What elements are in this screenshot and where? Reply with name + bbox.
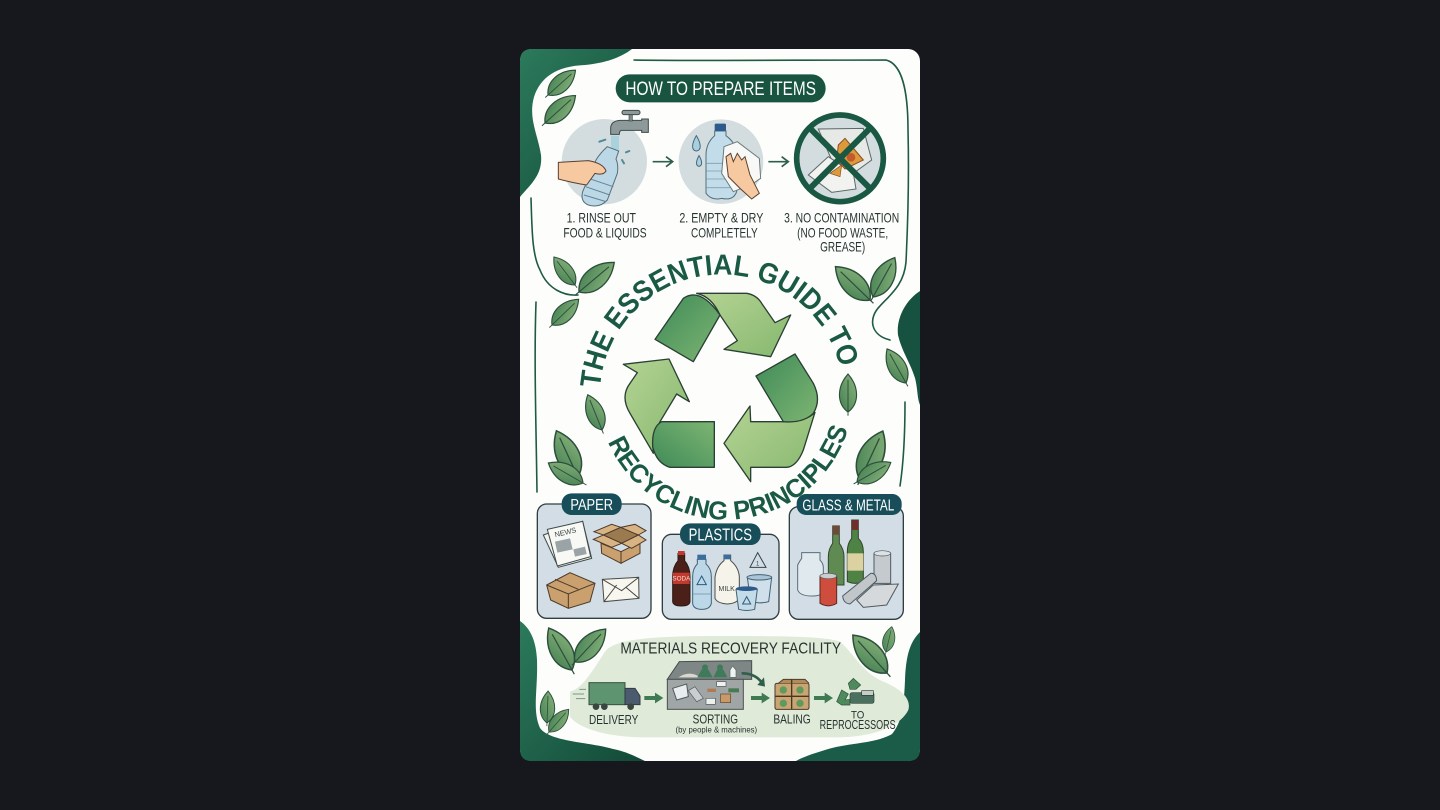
facility background [570,636,909,737]
corner blob: bottom left [520,621,645,761]
step labels: FOOD & LIQUIDS [563,225,647,240]
stage labels: TO [851,709,864,721]
panel: plastics [662,523,779,619]
arrow [644,693,663,703]
circular title [580,254,858,520]
arrow [653,157,673,167]
stage labels: BALING [773,712,811,727]
panel: plastics: SODA [672,576,691,583]
panel: paper: NEWS [554,525,577,539]
stage labels: REPROCESSORS [820,718,896,732]
panel: paper [537,493,651,618]
panel: glass & metal: GLASS & METAL [802,497,895,514]
stage labels: SORTING [693,712,738,727]
corner blob: top left [520,49,632,197]
panel: plastics: 1 [756,561,760,567]
icon: delivery truck [573,683,640,710]
heading pill: HOW TO PREPARE ITEMS [625,79,816,100]
leaves [536,64,916,739]
circular title: THE ESSENTIAL GUIDE TO [580,254,858,386]
step 3 icon: no pizza box [797,115,883,202]
corner blob: bottom right [796,632,920,761]
icon: sorting station [667,661,765,709]
infographic card [520,49,920,761]
panel: materials recovery facility [570,636,909,737]
circular title: RECYCLING PRINCIPLES [608,426,846,520]
stage labels: DELIVERY [589,712,638,727]
arrow [751,693,770,703]
step labels: COMPLETELY [691,225,758,240]
step 1 icon: rinse bottle under tap [558,110,648,206]
step labels: 1. RINSE OUT [567,211,637,226]
step labels: GREASE) [820,239,865,254]
panel: plastics: PLASTICS [689,525,752,545]
icon: bales [775,679,809,709]
panel: how to prepare items [558,74,899,254]
panel: paper: PAPER [570,497,613,514]
frame lines [531,60,908,492]
arrow [768,157,788,167]
arrow [814,693,833,703]
recycling symbol [623,293,817,482]
panel: glass & metal [789,494,903,619]
heading: MATERIALS RECOVERY FACILITY [620,641,841,658]
step labels: 3. NO CONTAMINATION [784,211,899,226]
edge blob: right middle [898,291,920,405]
heading pill [616,74,826,102]
step 2 icon: dry bottle with cloth [679,119,763,204]
icon: recycle to reprocessors [837,678,874,705]
panel: materials [537,493,903,619]
step labels [563,211,899,254]
stage labels: (by people & machines) [675,725,757,735]
step labels: (NO FOOD WASTE, [797,225,888,240]
step labels: 2. EMPTY & DRY [679,211,763,226]
panel: plastics: MILK [719,586,735,593]
stage labels [589,709,896,735]
